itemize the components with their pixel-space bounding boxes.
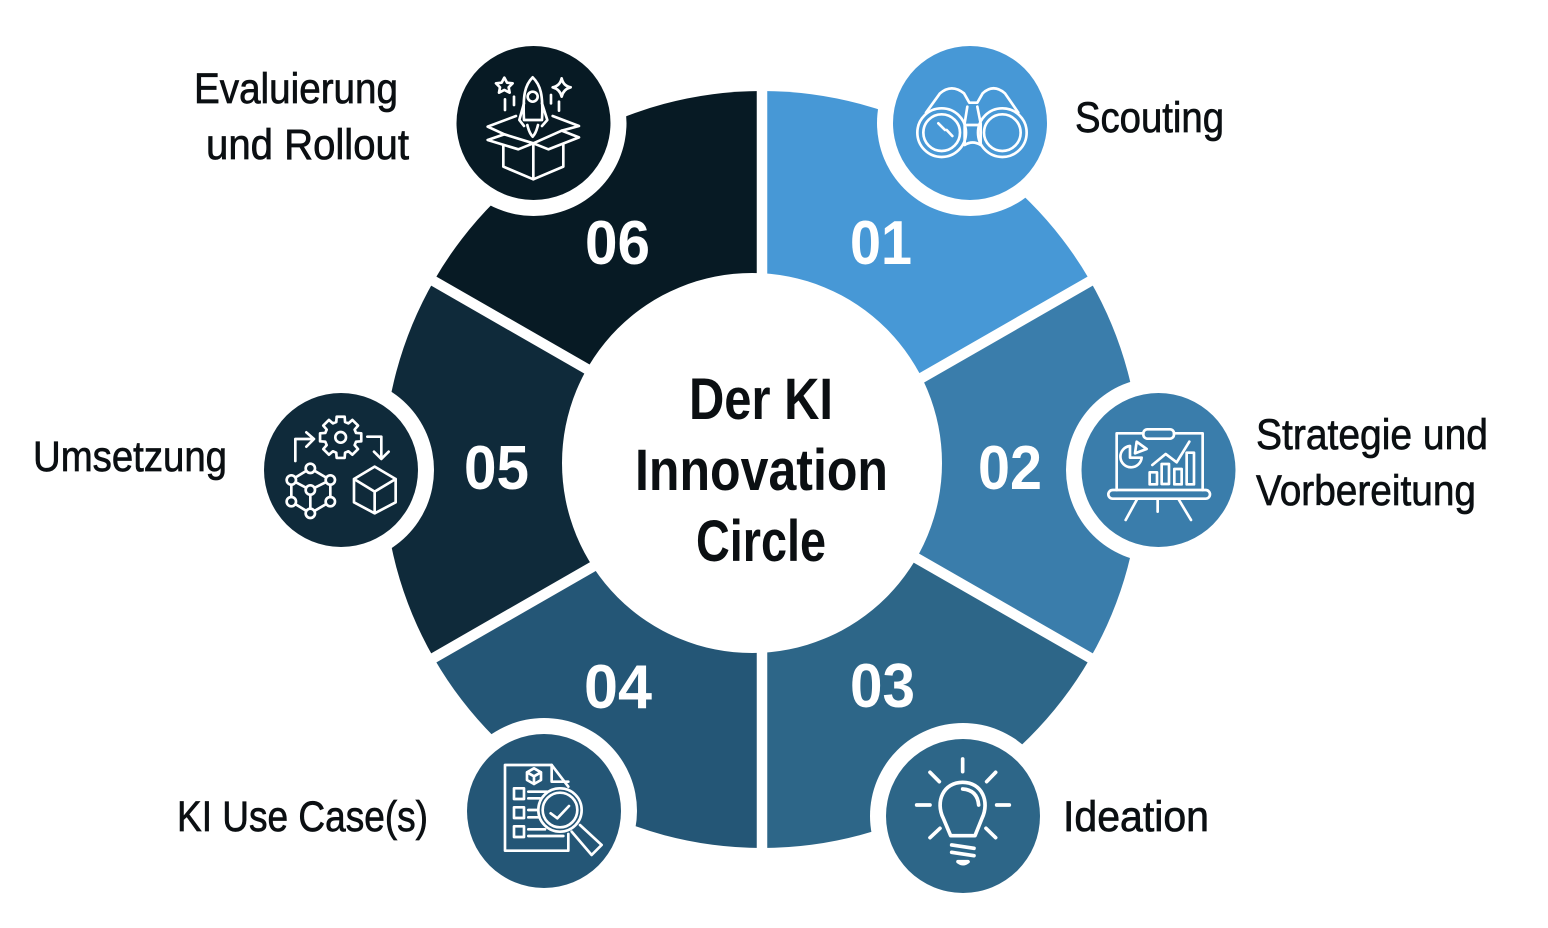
number 02: 02 bbox=[978, 434, 1042, 503]
icon: presentation board bbox=[1066, 378, 1251, 562]
title: Circle bbox=[696, 509, 826, 574]
label: Umsetzung: Umsetzung bbox=[33, 433, 227, 481]
centre circle bbox=[562, 273, 942, 653]
sector 03 bbox=[762, 470, 1090, 848]
label: Scouting: Scouting bbox=[1075, 94, 1224, 142]
number 06: 06 bbox=[585, 209, 650, 278]
sector 02 bbox=[762, 280, 1141, 659]
icon: light bulb bbox=[870, 723, 1056, 909]
label: Evaluierung und Rollout: und Rollout bbox=[206, 121, 409, 169]
sector 05 bbox=[383, 280, 762, 659]
number 03: 03 bbox=[850, 652, 915, 721]
label: Strategie und Vorbereitung: Vorbereitung bbox=[1256, 467, 1476, 515]
sector 04 bbox=[434, 470, 762, 848]
label: Evaluierung und Rollout bbox=[194, 65, 409, 169]
icon: rocket from box bbox=[440, 30, 626, 216]
sector 01 bbox=[762, 91, 1090, 470]
label: Strategie und Vorbereitung: Strategie und bbox=[1256, 411, 1488, 459]
icon: process gear molecule cube bbox=[248, 377, 434, 563]
title: Der KI bbox=[689, 367, 833, 432]
sector 06 bbox=[434, 91, 762, 470]
label: Strategie und Vorbereitung bbox=[1256, 411, 1488, 515]
label: Evaluierung und Rollout: Evaluierung bbox=[194, 65, 398, 113]
icon: checklist with magnifier bbox=[451, 718, 637, 904]
title: Innovation bbox=[635, 438, 888, 503]
number 05: 05 bbox=[464, 434, 529, 503]
label: Ideation: Ideation bbox=[1063, 793, 1209, 841]
title bbox=[635, 367, 888, 574]
icon: binoculars bbox=[877, 30, 1063, 216]
label: KI Use Case(s): KI Use Case(s) bbox=[177, 793, 428, 841]
number 04: 04 bbox=[584, 653, 653, 722]
number 01: 01 bbox=[850, 209, 912, 278]
